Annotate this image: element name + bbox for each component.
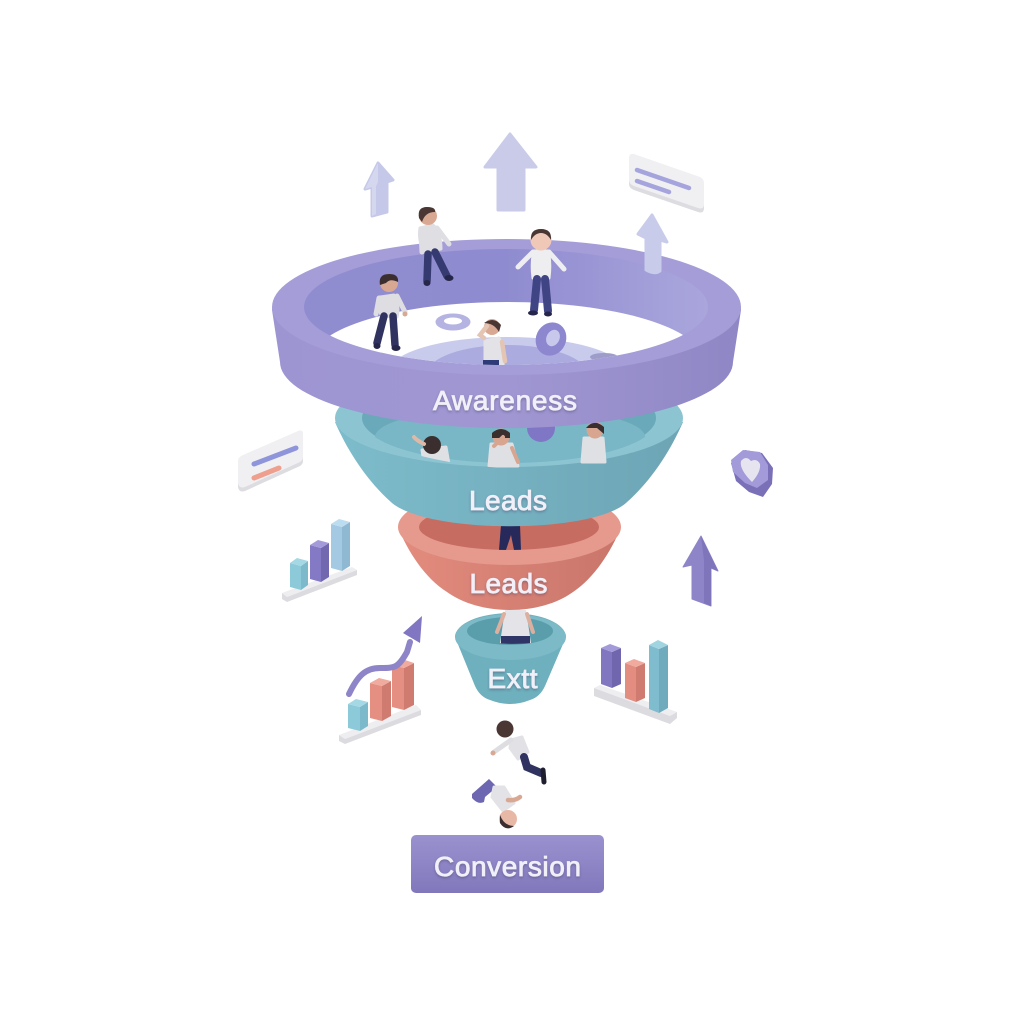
person center in ring — [480, 319, 505, 367]
ring top surface — [272, 239, 741, 375]
red funnel opening — [419, 504, 599, 550]
person standing right on ring — [518, 229, 564, 316]
arrow: large up arrow top — [485, 134, 536, 210]
exit funnel opening — [467, 617, 553, 645]
leads label: Leads — [470, 568, 548, 599]
panel: awareness ring tier — [272, 207, 741, 428]
torus icon upright — [530, 317, 572, 361]
exit label: Extt — [488, 663, 538, 694]
teal funnel body — [335, 422, 683, 526]
teal funnel rim — [335, 369, 683, 467]
ring inner wall — [304, 249, 708, 365]
teal funnel inner floor — [375, 407, 645, 463]
leads label: Leads — [469, 485, 547, 516]
red funnel body — [398, 527, 621, 610]
bar chart: left upper — [282, 519, 357, 602]
person jumping — [490, 720, 544, 782]
panel: exit funnel tier — [455, 610, 566, 704]
exit funnel rim — [455, 614, 566, 660]
badge inside teal funnel — [527, 414, 555, 442]
icon: message card top right — [629, 154, 704, 212]
opening through ring — [330, 302, 683, 365]
panel: second leads funnel tier — [398, 512, 621, 610]
person legs inside red funnel — [499, 525, 521, 550]
person flipping upside down — [472, 779, 520, 828]
person top left on ring — [419, 207, 454, 286]
icon: heart badge — [731, 450, 773, 497]
icon: message card left — [238, 430, 303, 492]
conversion button — [411, 835, 604, 893]
arrow: small up arrow top left — [365, 163, 393, 216]
people inside teal funnel — [414, 422, 605, 470]
arrow: up arrow on ring right — [638, 215, 667, 273]
person left in ring — [374, 274, 408, 351]
ring side — [272, 242, 741, 428]
red funnel rim — [398, 489, 621, 565]
arrow: purple up arrow right — [683, 536, 718, 606]
bar chart: left lower with trend arrow — [339, 616, 422, 744]
person inside exit funnel — [497, 610, 533, 646]
conversion label: Conversion — [434, 851, 581, 882]
awareness label: Awareness — [433, 385, 577, 416]
bar chart: right — [594, 640, 677, 724]
panel: first leads funnel tier — [335, 406, 683, 526]
exit funnel body — [455, 613, 566, 704]
trend arrow — [349, 616, 422, 694]
torus icon flat — [436, 314, 470, 330]
teal funnel inner wall — [362, 375, 656, 461]
